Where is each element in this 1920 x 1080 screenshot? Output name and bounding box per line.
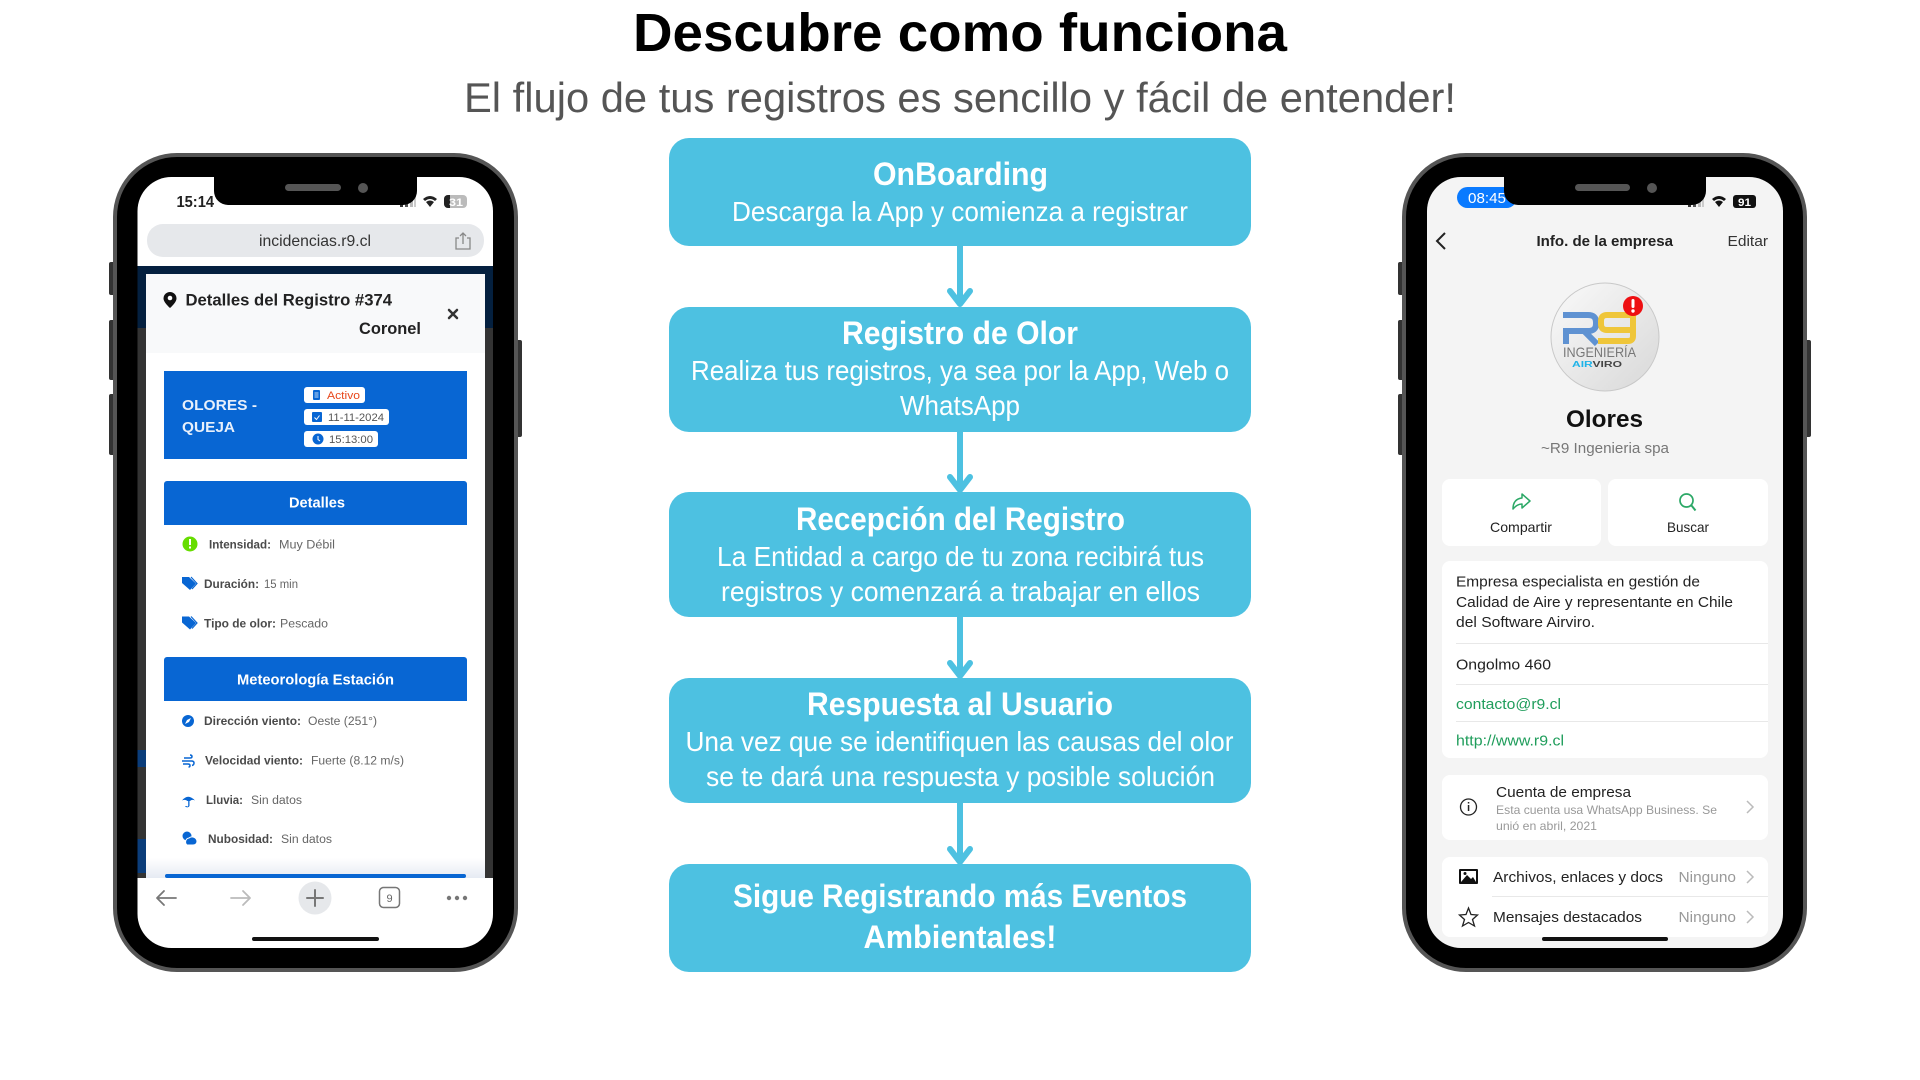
row: Duración: Duración: (204, 579, 259, 591)
company info card: Ongolmo 460 (1456, 656, 1551, 674)
flow step: Registro de Olor: Registro de Olor (842, 315, 1078, 351)
section: Meteorología Estación (164, 657, 467, 846)
logo avatar (1551, 283, 1659, 391)
business account card (1442, 775, 1768, 840)
status bar (176, 194, 467, 211)
row: Dirección viento: Dirección viento: (204, 716, 301, 728)
arrow: step 3 to 4 (950, 617, 970, 676)
company info card (1442, 561, 1768, 758)
row: Nubosidad: Sin datos (281, 834, 332, 846)
profile name: ~R9 Ingenieria spa (1541, 440, 1670, 457)
flow step: Respuesta al Usuario: Respuesta al Usuario (807, 686, 1113, 722)
arrow: step 2 to 3 (950, 432, 970, 490)
row: Lluvia (182, 795, 302, 807)
flow step: Recepción del Registro: Recepción del Registro (796, 501, 1125, 537)
company info card: del Software Airviro. (1456, 614, 1595, 631)
arrow: step 1 to 2 (950, 246, 970, 304)
bottom list card (1442, 857, 1768, 937)
row: Archivos: Archivos, enlaces y docs (1493, 869, 1663, 886)
title: Descubre como funciona (633, 3, 1288, 63)
arrow: step 4 to 5 (950, 803, 970, 862)
flow step: Recepción del Registro: La Entidad a cargo de tu zona recibirá tus (717, 541, 1204, 572)
row: Lluvia: Sin datos (251, 795, 302, 807)
section: Meteorología Estación: Meteorología Estación (237, 672, 394, 688)
url bar: incidencias.r9.cl (259, 233, 371, 250)
button: Buscar: Buscar (1667, 519, 1709, 535)
business account card: Cuenta de empresa (1496, 784, 1632, 801)
row: Velocidad viento: Fuerte (8.12 m/s) (311, 756, 404, 768)
notch (1504, 175, 1706, 205)
row: Velocidad viento (182, 755, 404, 768)
flow step: Respuesta al Usuario (669, 678, 1251, 803)
company info card: Calidad de Aire y representante en Chile (1456, 594, 1733, 611)
row: Nubosidad (182, 832, 332, 846)
row: Duración: 15 min (264, 579, 298, 591)
row: Mensajes destacados (1460, 908, 1753, 926)
profile name (1541, 406, 1670, 457)
flow step: OnBoarding: Descarga la App y comienza a registrar (732, 196, 1188, 227)
badge: date: 11-11-2024 (328, 412, 384, 424)
flow step: Recepción del Registro: registros y comenzará a trabajar en ellos (721, 576, 1200, 607)
home indicator (1542, 937, 1668, 941)
flow step: Respuesta al Usuario: se te dará una respuesta y posible solución (706, 761, 1215, 792)
section: Detalles (164, 481, 467, 630)
modal header: Detalles del Registro #374 (186, 292, 393, 310)
status icons (1688, 195, 1756, 209)
row: Tipo de olor: Pescado (280, 618, 328, 630)
status panel: QUEJA (182, 420, 236, 436)
row: Archivos (1459, 869, 1753, 886)
modal header (164, 292, 457, 338)
notch (214, 175, 417, 205)
nav bar (1437, 233, 1768, 250)
flow step: Sigue Registrando: Sigue Registrando más Eventos (733, 878, 1187, 914)
status panel (164, 371, 467, 459)
browser toolbar: 9 (386, 893, 393, 905)
business account card: Esta cuenta usa WhatsApp Business. Se (1496, 803, 1717, 817)
badge: time: 15:13:00 (329, 434, 373, 446)
business account card: unió en abril, 2021 (1496, 819, 1597, 833)
row: Nubosidad: Nubosidad: (208, 834, 273, 846)
row: Dirección viento (182, 715, 377, 728)
row: Mensajes destacados: Ninguno (1678, 909, 1736, 926)
button: Compartir (1442, 479, 1601, 546)
flow step: Recepción del Registro (669, 492, 1251, 617)
badge: Activo: Activo (327, 390, 360, 402)
subtitle: El flujo de tus registros es sencillo y fácil de entender! (464, 74, 1456, 121)
phone frame (109, 155, 522, 970)
home indicator (252, 937, 379, 941)
row: Dirección viento: Oeste (251°) (308, 716, 377, 728)
row: Intensidad (182, 536, 335, 552)
company info card: Empresa especialista en gestión de (1456, 574, 1700, 590)
flow step: Registro de Olor (669, 307, 1251, 432)
row: Intensidad: Muy Débil (279, 540, 335, 552)
flow step: Sigue Registrando: Ambientales! (864, 919, 1056, 955)
badge: time (304, 431, 378, 447)
time pill (1457, 187, 1517, 208)
logo avatar: INGENIERÍA (1563, 344, 1637, 360)
screen (1427, 177, 1783, 948)
flow step: Registro de Olor: WhatsApp (900, 390, 1020, 421)
flow step: Registro de Olor: Realiza tus registros, ya sea por la App, Web o (691, 355, 1229, 386)
flow step: OnBoarding (669, 138, 1251, 246)
right phone (1398, 155, 1811, 970)
status bar: 31 (449, 197, 463, 209)
row: Intensidad: Intensidad: (209, 540, 271, 552)
time pill: 08:45 (1468, 190, 1506, 207)
badge: Activo (304, 387, 365, 403)
left phone (109, 155, 522, 970)
flow step: Sigue Registrando (669, 864, 1251, 972)
row: Archivos: Ninguno (1678, 869, 1736, 886)
section: Detalles: Detalles (289, 496, 345, 512)
company info card: contacto@r9.cl (1456, 696, 1561, 713)
modal header: Coronel (359, 320, 421, 338)
nav bar: Editar (1728, 233, 1768, 250)
flow step: Respuesta al Usuario: Una vez que se identifiquen las causas del olor (686, 726, 1234, 757)
logo avatar: AIR VIRO (1572, 360, 1622, 369)
nav bar: Info. de la empresa (1536, 233, 1674, 250)
row: Lluvia: Lluvia: (206, 795, 243, 807)
company info card: http://www.r9.cl (1456, 732, 1564, 750)
status panel: OLORES - (182, 398, 257, 414)
phone frame (1398, 155, 1811, 970)
row: Velocidad viento: Velocidad viento: (205, 756, 303, 768)
alert badge (1623, 296, 1643, 316)
modal card (146, 274, 485, 878)
status icons: 91 (1738, 197, 1751, 209)
screen (137, 177, 493, 948)
browser toolbar (157, 882, 467, 914)
row: Tipo de olor: Tipo de olor: (204, 618, 276, 630)
url bar (147, 224, 484, 257)
button: Buscar (1608, 479, 1768, 546)
row: Tipo de olor (182, 616, 328, 630)
flow step: OnBoarding: OnBoarding (873, 156, 1048, 192)
button: Compartir: Compartir (1490, 519, 1552, 535)
row: Mensajes destacados: Mensajes destacados (1493, 909, 1642, 926)
status bar: 15:14 (176, 194, 214, 211)
badge: date (304, 409, 389, 425)
row: Duración (182, 577, 298, 591)
profile name: Olores (1566, 406, 1643, 433)
